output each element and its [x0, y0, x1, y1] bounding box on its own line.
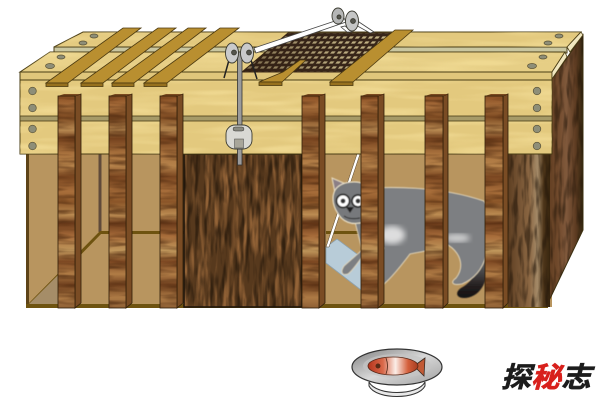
panel: front upper boards — [20, 80, 552, 154]
logo: 探秘志: 探秘志 — [501, 362, 595, 393]
panel: vertical posts — [58, 94, 508, 308]
panel: right side wall — [508, 30, 590, 310]
panel: top surface planks — [20, 32, 583, 80]
post 7 — [485, 94, 508, 308]
icon: trigger rod — [326, 154, 360, 247]
panel: pressure plate — [326, 239, 361, 290]
panel: interior corner lines — [28, 154, 486, 305]
icon: pulley rods — [254, 18, 374, 53]
icon: rope and door weight — [226, 52, 252, 165]
icon: bolts on top and front boards — [29, 34, 563, 150]
fish eye — [376, 364, 380, 368]
icon: fish dish — [352, 349, 442, 396]
post 4 — [302, 94, 325, 308]
cat tail — [457, 258, 487, 298]
cat eyes — [336, 194, 350, 208]
dish plate — [352, 349, 442, 385]
panel: top slats — [46, 28, 413, 86]
fish tail — [414, 358, 425, 376]
fish body — [368, 357, 418, 375]
icon: wire mesh hatch — [242, 33, 398, 72]
post 3 — [160, 94, 183, 308]
panel: back wall of the box — [26, 154, 552, 308]
post 1 — [58, 94, 81, 308]
post 5 — [361, 94, 384, 308]
cat body — [342, 187, 492, 289]
panel: dark sliding door — [184, 154, 302, 307]
post 6 — [425, 94, 448, 308]
cat body highlight — [379, 226, 405, 244]
cat nose — [346, 207, 354, 213]
icon: pulleys — [224, 8, 358, 79]
post 2 — [109, 94, 132, 308]
dish foot — [369, 382, 425, 396]
icon: grey cat — [332, 178, 492, 298]
cat ear — [332, 178, 346, 198]
cat head — [333, 182, 364, 224]
